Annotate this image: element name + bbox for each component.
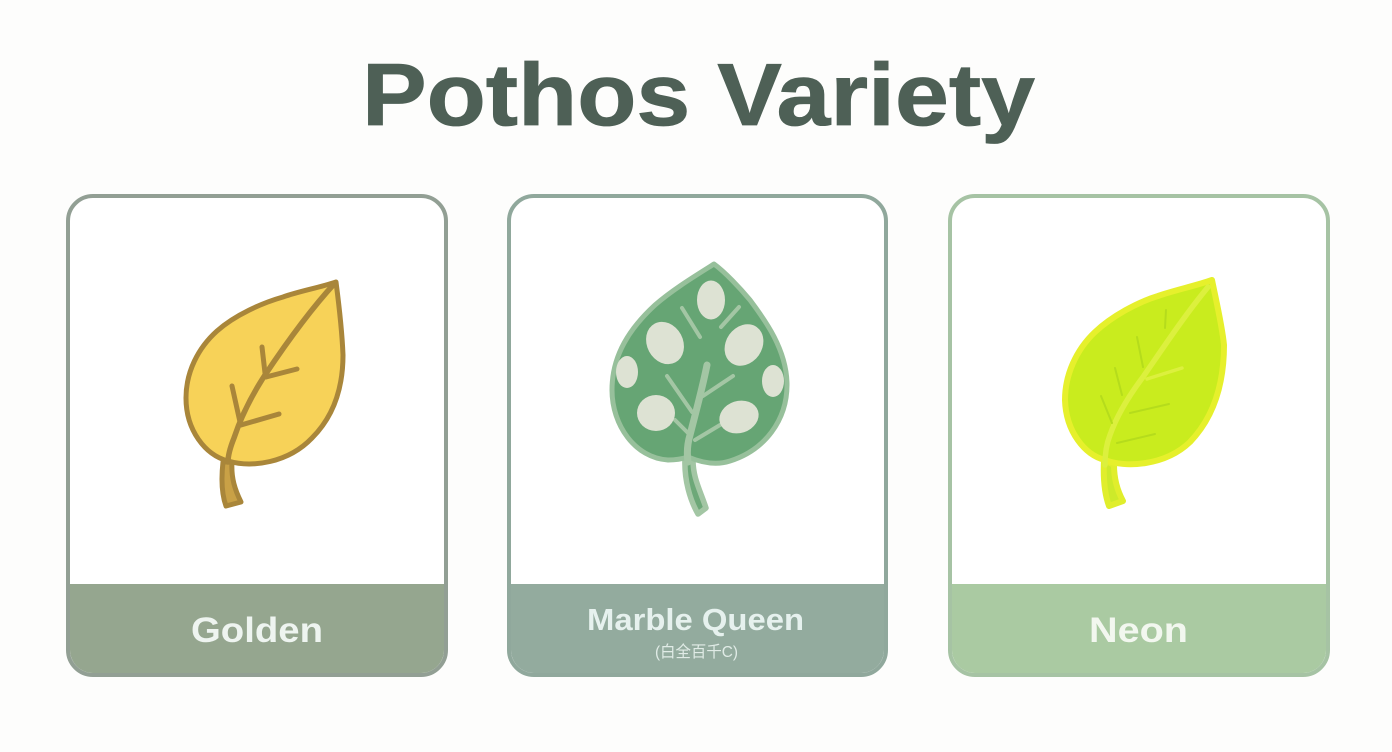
panel: Marble Queen [509,196,886,675]
icon: golden pothos leaf [186,282,343,506]
label: Marble Queen: Marble Queen [587,602,804,637]
card frame: Marble Queen [509,196,886,675]
sublabel: Marble Queen: (白全百千C) [655,643,738,661]
label band: Golden [70,584,444,673]
label: Neon: Neon [1089,611,1188,650]
label band: Marble Queen [511,584,884,673]
label band: Neon [952,584,1326,673]
panel: Golden [68,196,446,675]
card frame: Golden [68,196,446,675]
panel: Neon [950,196,1328,675]
icon: marble queen pothos leaf [612,264,787,514]
card frame: Neon [950,196,1328,675]
icon: neon pothos leaf [1065,280,1224,506]
label: Golden: Golden [191,611,323,650]
title: Pothos Variety [362,45,1035,144]
